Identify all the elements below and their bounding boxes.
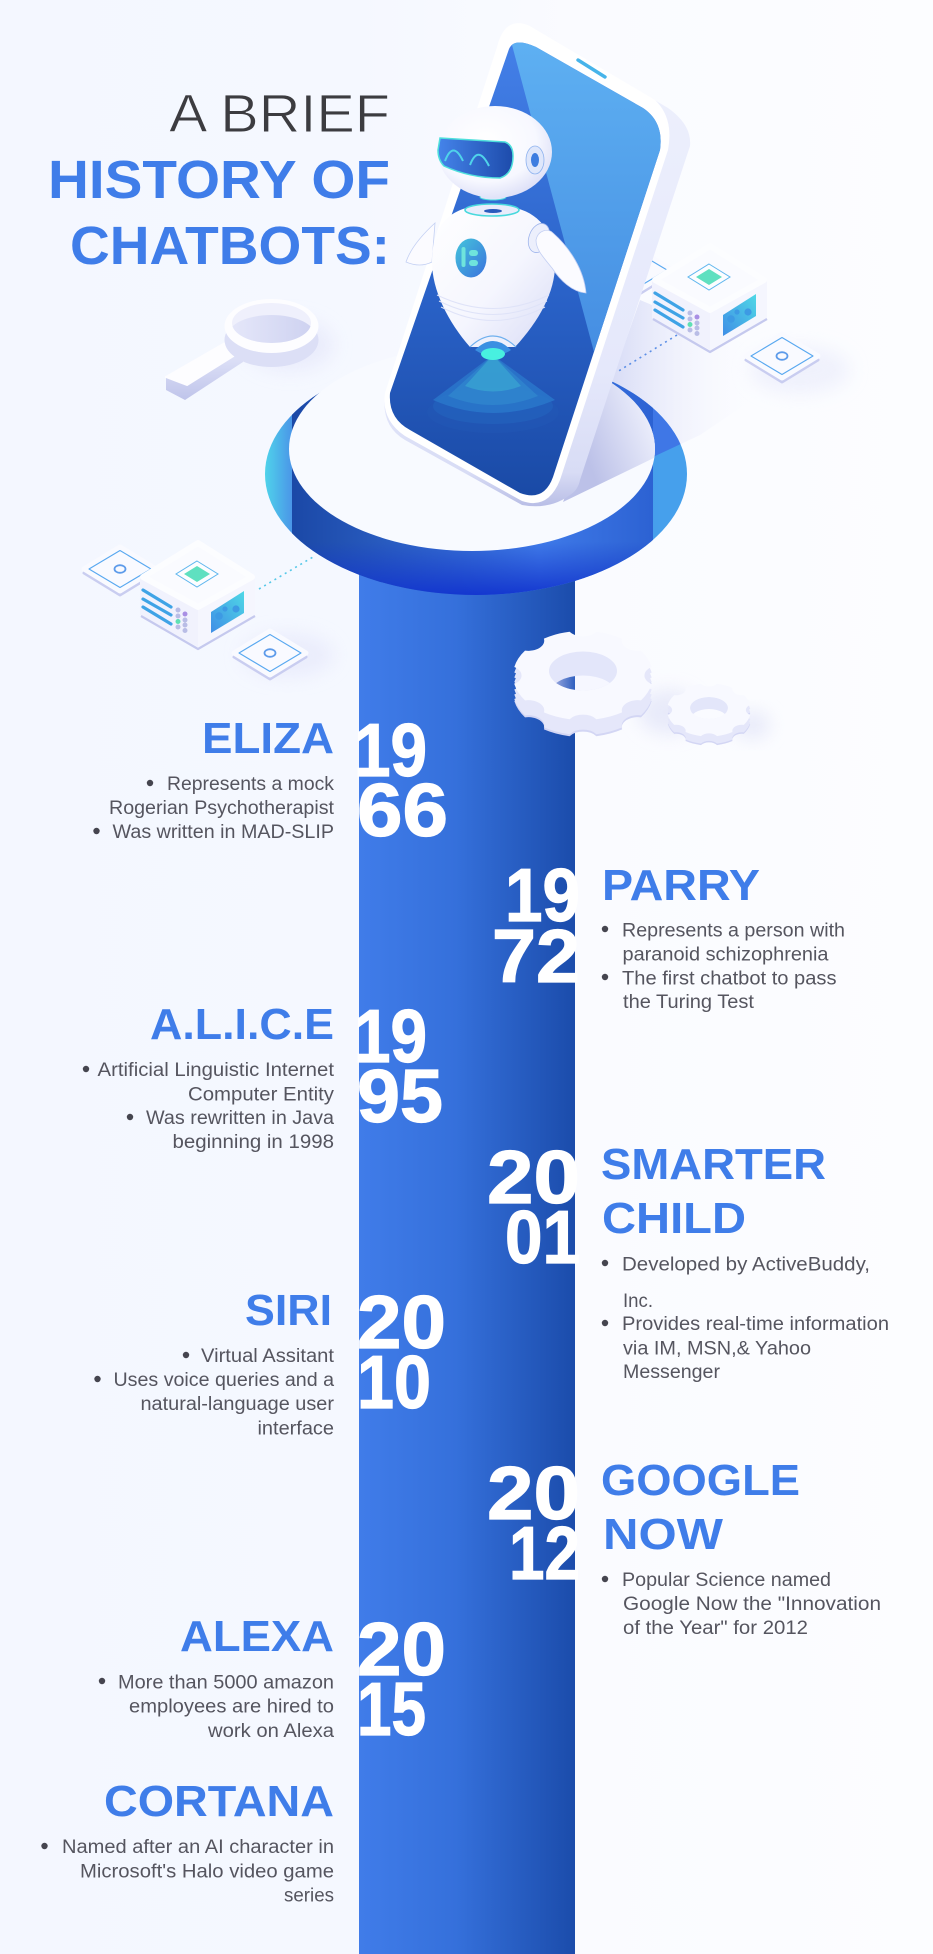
panel: SMARTER CHILD: Messenger (623, 1362, 721, 1383)
year 2012: 12 (509, 1511, 580, 1595)
year 2015: 20 (357, 1607, 446, 1691)
ear (526, 146, 544, 174)
gear hole (549, 652, 617, 690)
icon: small gear (668, 695, 750, 745)
server cube (652, 246, 767, 352)
collar (465, 204, 519, 216)
server left with tiles (84, 543, 334, 679)
phone rim (384, 23, 669, 503)
top surface (289, 347, 655, 551)
year 2001: 01 (505, 1195, 580, 1279)
panel: SMARTER CHILD: via IM, MSN,& Yahoo (623, 1338, 811, 1360)
right arm (524, 220, 586, 293)
year 2015 (357, 1607, 446, 1751)
year 2012 (487, 1451, 580, 1595)
panel: SMARTER CHILD: Inc. (623, 1291, 653, 1312)
gear side (668, 688, 750, 745)
server right with tiles (600, 246, 850, 394)
gear shadows (638, 690, 770, 739)
panel: ELIZA (93, 714, 335, 843)
panel: SMARTER CHILD (601, 1140, 889, 1383)
year 2010: 10 (357, 1340, 431, 1424)
base dome (470, 336, 516, 360)
panel: CORTANA: series (284, 1886, 334, 1906)
year 1966: 66 (357, 768, 448, 852)
panel: A.L.I.C.E: A.L.I.C.E (150, 1000, 334, 1049)
title (48, 84, 390, 276)
phone (384, 23, 690, 506)
title: CHATBOTS: (70, 216, 390, 276)
visor (438, 138, 513, 178)
panel: CORTANA: CORTANA (104, 1777, 334, 1826)
connector (259, 557, 313, 589)
connector (617, 335, 677, 372)
year 1972: 72 (492, 914, 580, 998)
light cone (427, 355, 559, 433)
phone cast shadow (563, 383, 655, 502)
panel: SMARTER CHILD: SMARTER (601, 1140, 826, 1189)
year 2001: 20 (487, 1135, 580, 1219)
panel: GOOGLE NOW (601, 1456, 881, 1639)
panel: CORTANA (41, 1777, 334, 1906)
year 2015: 15 (357, 1667, 426, 1751)
panel: ALEXA: More than 5000 amazon (118, 1672, 334, 1694)
panel: PARRY: Represents a person with (622, 920, 845, 942)
panel: PARRY: The first chatbot to pass (622, 968, 836, 990)
server cube (140, 543, 255, 649)
screen highlight (512, 42, 661, 352)
panel: ALEXA (99, 1612, 334, 1742)
platform (265, 382, 687, 595)
screen (390, 42, 661, 495)
phone shadow (612, 300, 760, 457)
panel: ALEXA: work on Alexa (207, 1721, 334, 1742)
tile left (84, 547, 156, 595)
year 1966: 19 (354, 708, 427, 792)
panel: GOOGLE NOW: GOOGLE (601, 1456, 800, 1505)
title: HISTORY OF (48, 150, 390, 210)
panel: CORTANA: Microsoft's Halo video game (80, 1862, 334, 1882)
head (438, 106, 552, 198)
icon: large gear (514, 632, 652, 736)
left arm (406, 223, 435, 265)
year 1995 (354, 994, 443, 1138)
tile shadow (242, 633, 334, 677)
gear hole (690, 697, 728, 714)
panel: PARRY: paranoid schizophrenia (622, 944, 829, 966)
panel: SIRI: SIRI (245, 1286, 332, 1335)
panel: GOOGLE NOW: Google Now the "Innovation (623, 1594, 881, 1615)
panel: SMARTER CHILD: Provides real-time information (622, 1314, 889, 1335)
panel: A.L.I.C.E: Was rewritten in Java (146, 1108, 334, 1129)
tile behind (600, 248, 672, 296)
neck (480, 194, 506, 200)
panel: PARRY: PARRY (602, 861, 760, 910)
gear side (514, 637, 652, 736)
ring (265, 353, 687, 595)
icon: magnifying glass (166, 299, 334, 400)
body lines (437, 295, 549, 320)
panel: GOOGLE NOW: Popular Science named (622, 1570, 831, 1591)
panel: SIRI: natural-language user (140, 1394, 335, 1415)
gear face (668, 684, 750, 736)
tile front (746, 334, 818, 382)
panel: CORTANA: Named after an AI character in (62, 1837, 334, 1858)
panel: SMARTER CHILD: CHILD (602, 1194, 746, 1243)
robot (406, 106, 586, 433)
panel: SIRI (94, 1286, 335, 1440)
panel: A.L.I.C.E: beginning in 1998 (172, 1132, 334, 1153)
panel: ELIZA: Was written in MAD-SLIP (112, 822, 334, 843)
body (432, 205, 555, 347)
year 1995: 95 (357, 1054, 443, 1138)
panel: SIRI: Uses voice queries and a (114, 1370, 334, 1391)
panel: ELIZA: ELIZA (202, 714, 334, 763)
panel: PARRY (602, 861, 845, 1013)
year 1972: 19 (505, 853, 580, 937)
panel: GOOGLE NOW: of the Year" for 2012 (623, 1618, 808, 1639)
title: A BRIEF (169, 84, 390, 144)
panel: PARRY: the Turing Test (623, 992, 755, 1013)
tile bottom (234, 631, 306, 679)
cylinder (292, 382, 653, 595)
year 1995: 19 (354, 994, 427, 1078)
chest badge (456, 238, 486, 278)
year 2010 (357, 1280, 446, 1424)
ring shaded part (632, 392, 680, 456)
panel: A.L.I.C.E (83, 1000, 335, 1153)
panel: A.L.I.C.E: Computer Entity (188, 1084, 335, 1106)
timeline column (359, 560, 575, 1954)
panel: GOOGLE NOW: NOW (603, 1510, 724, 1559)
panel: SIRI: Virtual Assitant (201, 1346, 335, 1367)
panel: ELIZA: Represents a mock (167, 774, 335, 795)
year 1972 (492, 853, 580, 998)
panel: ALEXA: ALEXA (180, 1612, 334, 1661)
panel: ALEXA: employees are hired to (129, 1696, 334, 1718)
year 2001 (487, 1135, 580, 1279)
gear face (514, 632, 652, 719)
year 1966 (354, 708, 448, 852)
speaker (578, 60, 605, 77)
phone side (384, 26, 690, 506)
panel: SIRI: interface (258, 1418, 334, 1440)
panel: SMARTER CHILD: Developed by ActiveBuddy, (622, 1254, 870, 1276)
panel: A.L.I.C.E: Artificial Linguistic Internet (98, 1060, 335, 1081)
year 2010: 20 (357, 1280, 446, 1364)
panel: ELIZA: Rogerian Psychotherapist (109, 798, 335, 819)
year 2012: 20 (487, 1451, 580, 1535)
